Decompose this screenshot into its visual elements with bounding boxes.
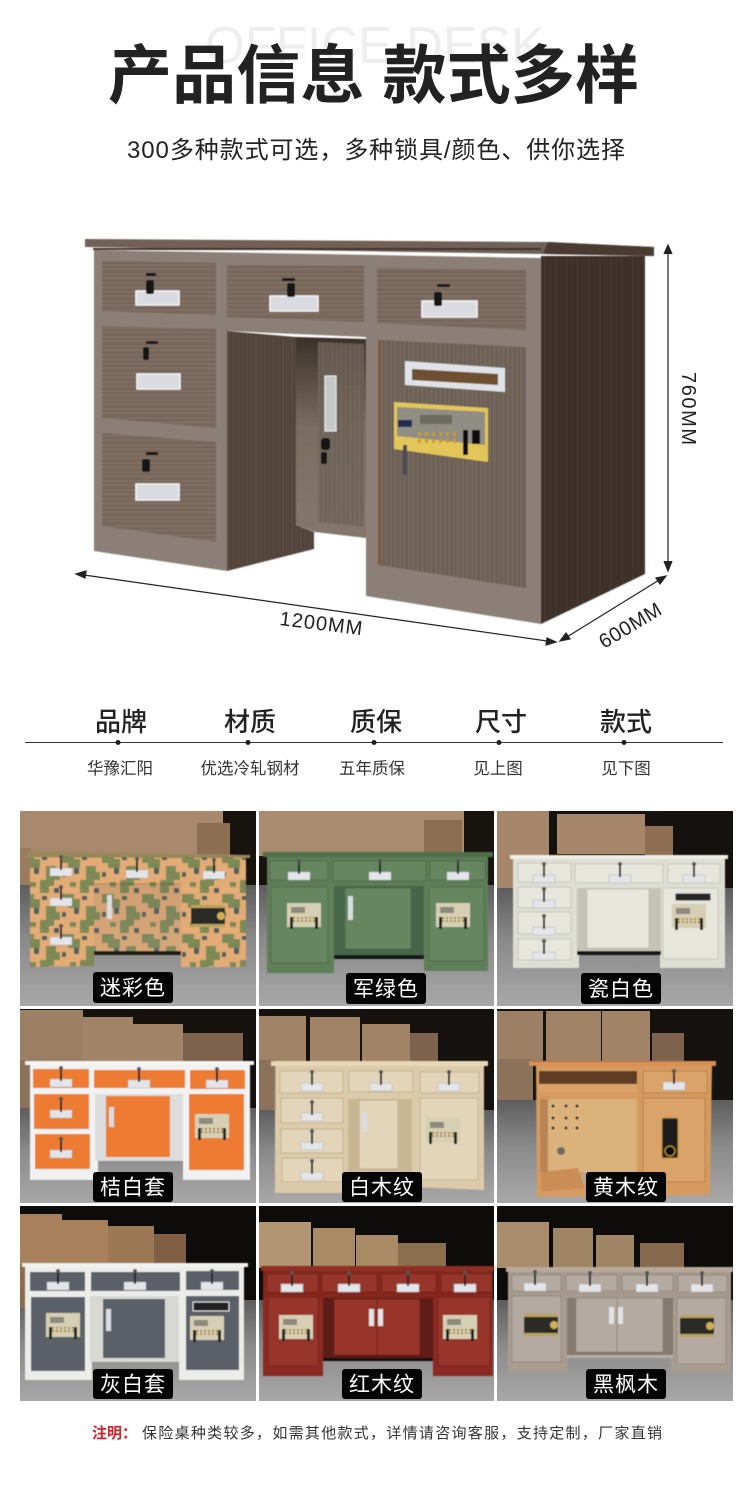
desk: [529, 1061, 716, 1197]
left drawers: [102, 261, 216, 315]
dimension: width arrow: [76, 571, 556, 645]
footer note: 注明：: [92, 1424, 137, 1442]
subtitle: 300多种款式可选，多种锁具/颜色、供你选择: [127, 137, 625, 164]
keys and locks: [142, 273, 450, 472]
panel: 桔白套: [20, 1009, 256, 1203]
product illustration: main desk: [85, 239, 654, 624]
desk front frame: [94, 250, 541, 624]
label: [586, 1369, 666, 1399]
drawer handles: [136, 291, 477, 500]
dimension label: 760MM: 760MM: [677, 372, 699, 445]
dimension: height arrow: [664, 245, 672, 571]
dimension: depth arrow: [560, 576, 666, 641]
spec values: [87, 759, 651, 778]
spec headings: 质保: [350, 707, 402, 737]
footer note: 保险桌种类较多，如需其他款式，详情请咨询客服，支持定制，厂家直销: [142, 1424, 662, 1442]
panel: 灰白套: [20, 1206, 256, 1401]
top centre drawer: [227, 265, 364, 322]
label: 桔白套: [100, 1176, 166, 1200]
spec values: 华豫汇阳: [87, 759, 153, 778]
dimension label: 600MM: 600MM: [595, 599, 666, 653]
spec values: 优选冷轧钢材: [200, 759, 300, 778]
inner door handle: [325, 376, 336, 431]
spec headings: 品牌: [95, 707, 147, 737]
panel: 黑枫木: [497, 1206, 733, 1401]
title: 产品信息 款式多样: [108, 40, 639, 112]
label: 黄木纹: [593, 1176, 659, 1200]
spec table: [25, 707, 723, 778]
label: [93, 972, 173, 1003]
spec headings: 材质: [224, 707, 276, 737]
spec values: 见上图: [473, 759, 523, 778]
spec headings: 尺寸: [475, 707, 527, 737]
label: [93, 1172, 173, 1202]
desk: [26, 851, 250, 967]
desk: [261, 1266, 494, 1376]
label: [581, 973, 661, 1004]
label: 军绿色: [353, 978, 419, 1001]
label: [93, 1369, 173, 1399]
desk: [25, 1061, 254, 1180]
panel: 白木纹: [259, 1009, 494, 1203]
desk: [510, 855, 728, 968]
label: [342, 1369, 422, 1399]
spec values: 见下图: [601, 760, 651, 778]
desk: [22, 1263, 248, 1380]
knee inner wall: [296, 337, 366, 538]
panel: 黄木纹: [497, 1009, 733, 1203]
spec headings: 款式: [600, 707, 652, 737]
small inner door: [318, 342, 364, 527]
desk top: [85, 239, 654, 256]
knee left wall: [227, 331, 314, 571]
desk: [506, 1267, 733, 1373]
desk side panel: [541, 256, 645, 624]
panel: 军绿色: [259, 811, 494, 1006]
label: 瓷白色: [588, 978, 654, 1001]
spec values: 五年质保: [339, 759, 406, 778]
top right drawer: [377, 268, 526, 330]
watermark: OFFICE DESK: OFFICE DESK: [205, 17, 545, 75]
label: 灰白套: [100, 1374, 166, 1396]
combination lock: [394, 402, 488, 475]
panel: 红木纹: [259, 1206, 494, 1401]
desk: [271, 1061, 488, 1193]
panel: 瓷白色: [497, 811, 733, 1006]
letter slot: [405, 361, 505, 392]
desk: [263, 852, 493, 973]
spec headings: [95, 707, 652, 737]
label: 迷彩色: [100, 977, 166, 1000]
label: [342, 1172, 422, 1202]
panel: 迷彩色: [20, 811, 256, 1006]
label: [346, 973, 426, 1004]
label: 白木纹: [349, 1176, 415, 1200]
dimension label: 1200MM: 1200MM: [278, 608, 363, 640]
label: [586, 1172, 666, 1202]
safe door: [379, 340, 526, 588]
label: 黑枫木: [593, 1374, 659, 1396]
label: 红木纹: [349, 1374, 415, 1396]
